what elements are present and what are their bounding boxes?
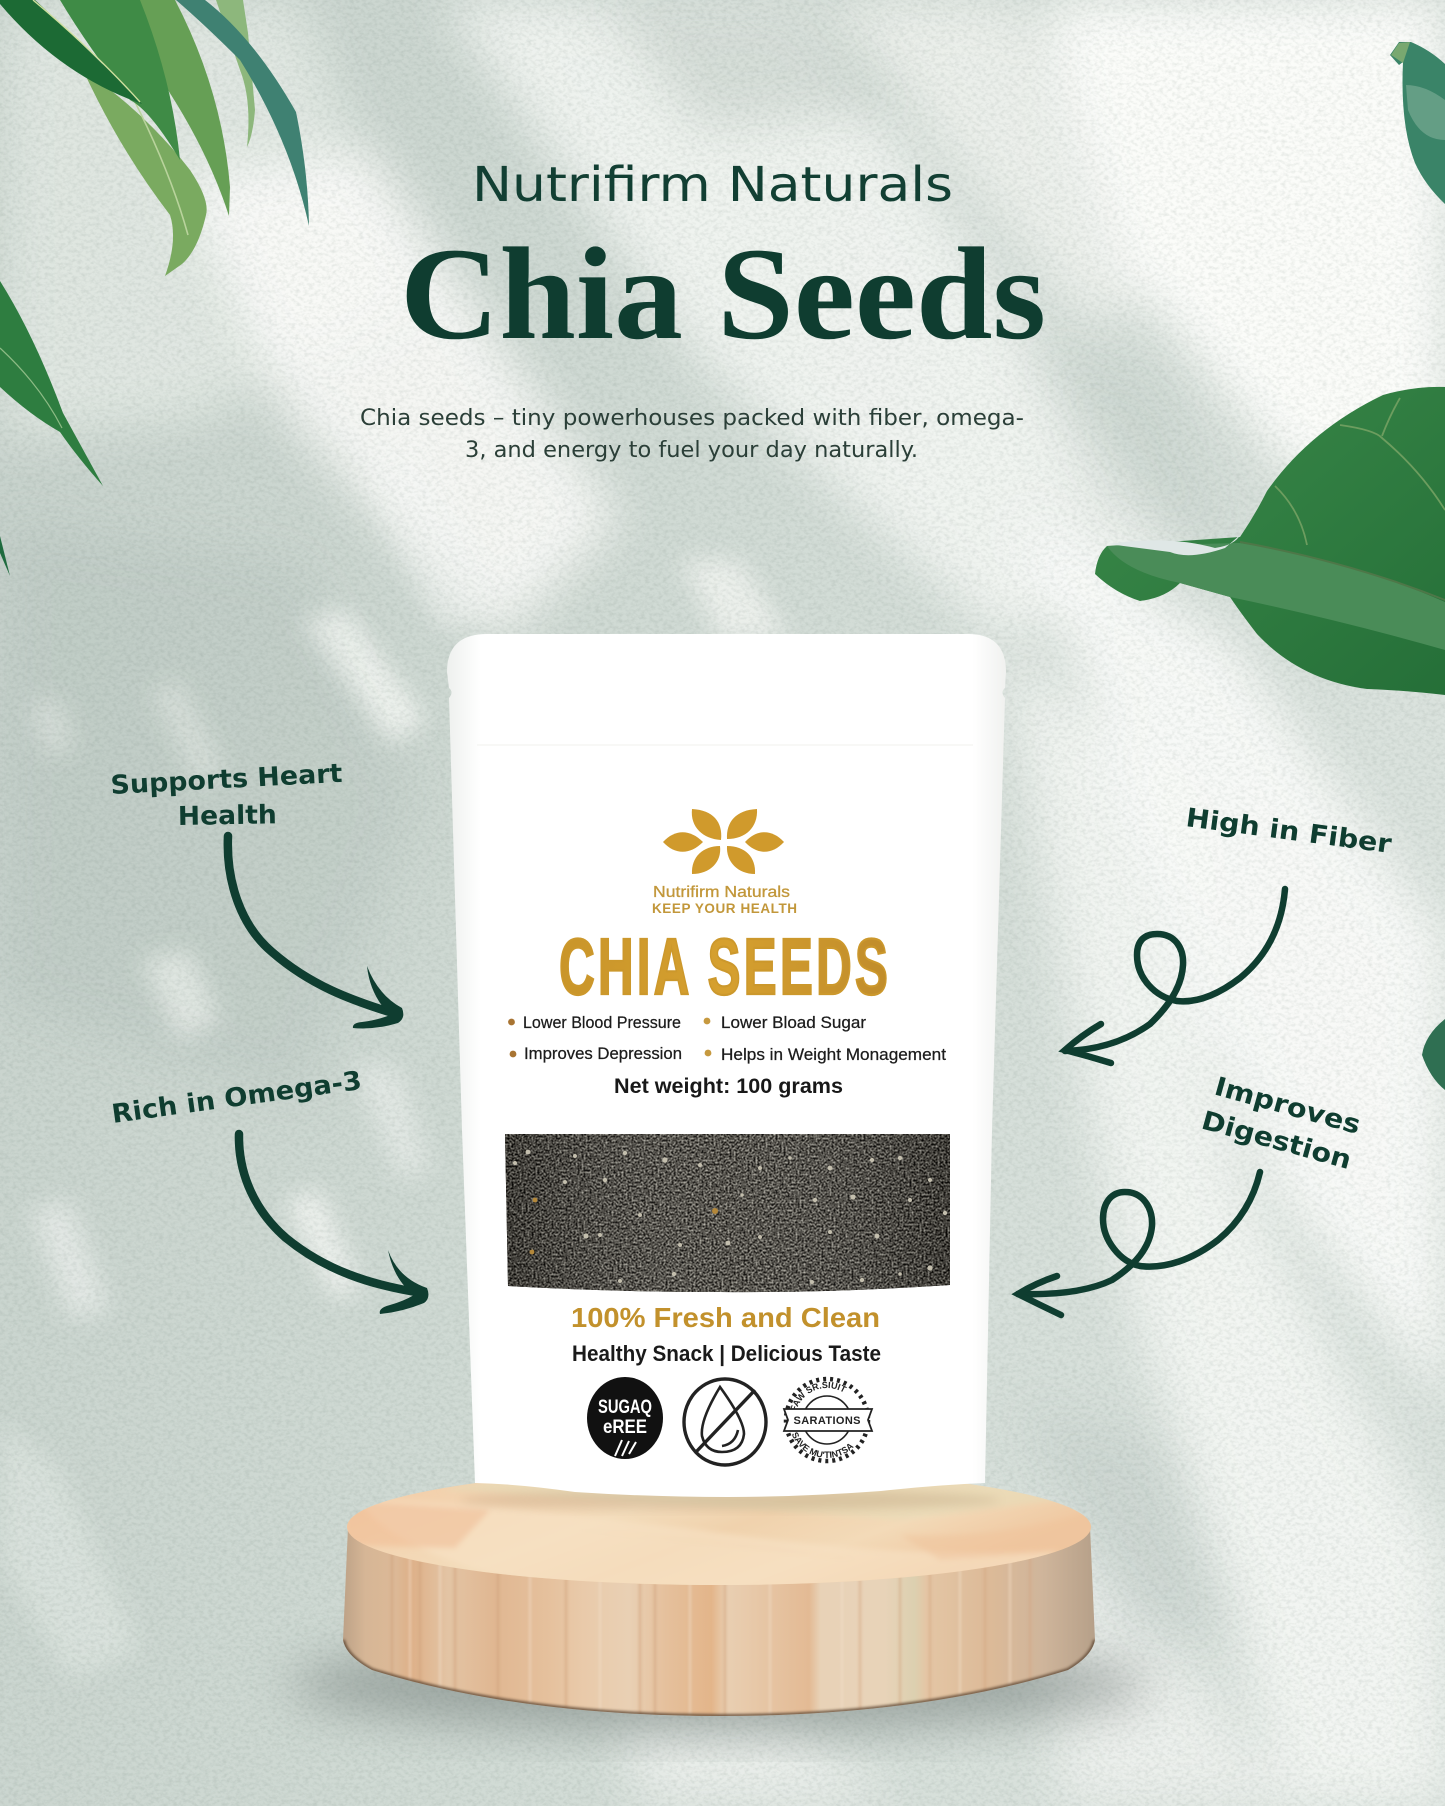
arrow: high in fiber [1065,889,1285,1063]
callout: improves digestion: Digestion [1198,1106,1355,1176]
product name: CHIA SEEDS [559,922,891,1011]
leaf: top-right small [1390,42,1445,204]
badge: stamp: FAW SR.SIUIT [790,1382,847,1408]
badge: stamp: SARATIONS [794,1415,860,1427]
callout: supports heart health: Health [178,800,277,832]
arrow: improves digestion [1018,1172,1260,1315]
leaves: top-left cluster [0,0,309,276]
logo: gold flower [663,809,784,874]
logo wordmark: Nutrifirm Naturals [653,884,790,901]
tagline black: Healthy Snack | Delicious Taste [572,1341,881,1366]
callout: improves digestion: Improves [1211,1072,1364,1141]
leaf: right lower edge [1422,1019,1445,1090]
product pouch [447,634,1006,1512]
subtitle text: 3, and energy to fuel your day naturally. [465,438,918,463]
callout: supports heart health [110,759,343,832]
logo wordmark [652,884,797,916]
tagline gold: 100% Fresh and Clean [571,1302,880,1333]
badge: stamp [782,1376,874,1464]
callout: high in fiber: High in Fiber [1184,803,1393,860]
benefits list: Lower Blood Pressure [523,1014,681,1032]
badge: sugar free: eREE [603,1417,647,1438]
subtitle text [360,406,1024,463]
badge: no oil [684,1379,766,1465]
arrow: rich in omega-3 [239,1134,428,1314]
callout: rich in omega-3: Rich in Omega-3 [110,1066,364,1130]
benefits list: Helps in Weight Monagement [721,1046,946,1064]
wooden podium [290,1469,1150,1733]
pouch body [447,634,1006,1497]
badge: sugar free [587,1377,663,1459]
benefits list: Improves Depression [524,1045,682,1063]
callout: supports heart health: Supports Heart [110,759,343,801]
net weight: Net weight: 100 grams [614,1075,843,1098]
benefits list: Lower Bload Sugar [721,1014,867,1032]
badge: sugar free: SUGAQ [598,1397,652,1418]
leaves: left edge [0,281,103,576]
benefits list [508,1014,946,1064]
arrow: supports heart health [228,836,403,1028]
logo wordmark: KEEP YOUR HEALTH [652,901,797,916]
title: Chia Seeds [400,220,1046,367]
badge: stamp: SAVE MU'TINTSA [792,1432,854,1458]
subtitle text: Chia seeds – tiny powerhouses packed with fiber, omega- [360,406,1024,431]
window of chia seeds [505,1134,950,1294]
header: brand name: Nutrifirm Naturals [472,157,953,213]
callout: improves digestion [1198,1072,1364,1176]
leaf: right big fig leaf [1095,387,1445,695]
